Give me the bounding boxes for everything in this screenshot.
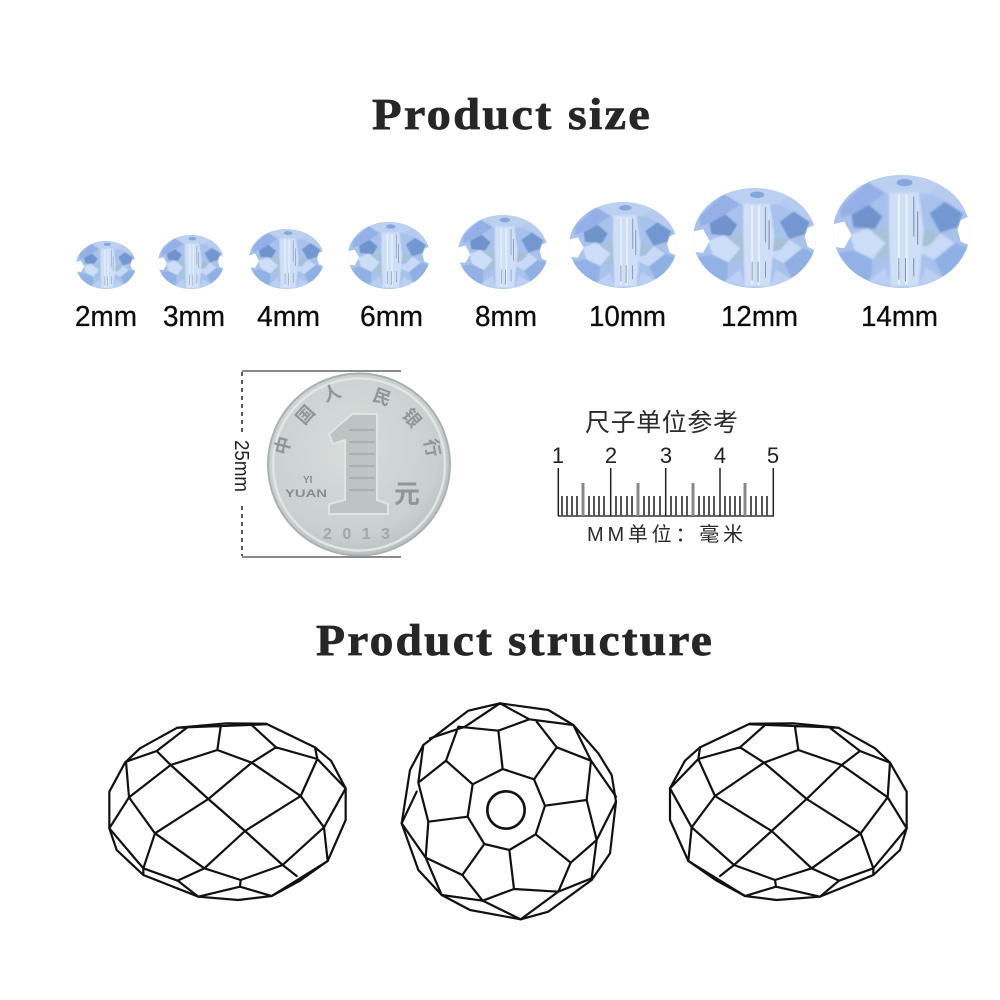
label: 10mm: 10mm — [589, 301, 666, 333]
bead: 8mm — [457, 212, 550, 290]
label: 14mm: 14mm — [861, 301, 938, 333]
coin comparison with 25mm dimension — [230, 371, 450, 557]
label: 4mm: 4mm — [257, 301, 320, 333]
ruler numbers: 3 — [660, 443, 672, 468]
bead: 3mm — [157, 233, 226, 290]
ruler reference — [552, 409, 779, 546]
wireframe: bead side view left — [109, 723, 346, 900]
ruler scale ticks — [558, 468, 774, 516]
ruler numbers: 5 — [767, 443, 779, 468]
coin: 2013 — [323, 526, 390, 543]
ruler numbers — [552, 443, 779, 468]
title: Product structure: Product structure — [316, 616, 714, 665]
bead: 10mm — [567, 198, 680, 289]
ruler numbers: 4 — [714, 443, 726, 468]
coin: YI — [303, 475, 313, 486]
bead: 6mm — [347, 219, 432, 290]
ruler numbers: 2 — [605, 443, 617, 468]
ruler numbers: 1 — [552, 443, 564, 468]
label: 3mm: 3mm — [163, 301, 225, 333]
bead: 14mm — [831, 170, 973, 290]
ruler heading: 尺子单位参考 — [585, 409, 738, 437]
ruler unit caption: MM单位：毫米 — [587, 523, 743, 546]
coin: 人 — [320, 381, 344, 406]
coin: 行 — [420, 437, 444, 459]
coin: 元 — [394, 479, 420, 509]
coin: 国 — [292, 402, 319, 428]
bead row with size labels — [75, 170, 973, 333]
coin — [268, 374, 450, 556]
label: 8mm: 8mm — [475, 301, 537, 333]
bead: 2mm — [75, 239, 137, 290]
label: 2mm: 2mm — [75, 301, 137, 333]
coin: 银 — [398, 405, 425, 431]
wireframe: bead front view with hole — [402, 703, 616, 919]
dimension lines — [242, 371, 401, 557]
coin: 民 — [370, 385, 394, 410]
dimension label: 25mm: 25mm — [230, 440, 252, 492]
bead: 4mm — [248, 226, 326, 290]
label: 12mm: 12mm — [721, 301, 798, 333]
wireframe: bead side view right — [670, 723, 907, 900]
coin: YUAN — [285, 488, 327, 500]
bead: 12mm — [691, 184, 819, 289]
title: Product size: Product size — [372, 90, 652, 139]
coin: 中 — [271, 434, 295, 457]
label: 6mm: 6mm — [360, 301, 423, 333]
